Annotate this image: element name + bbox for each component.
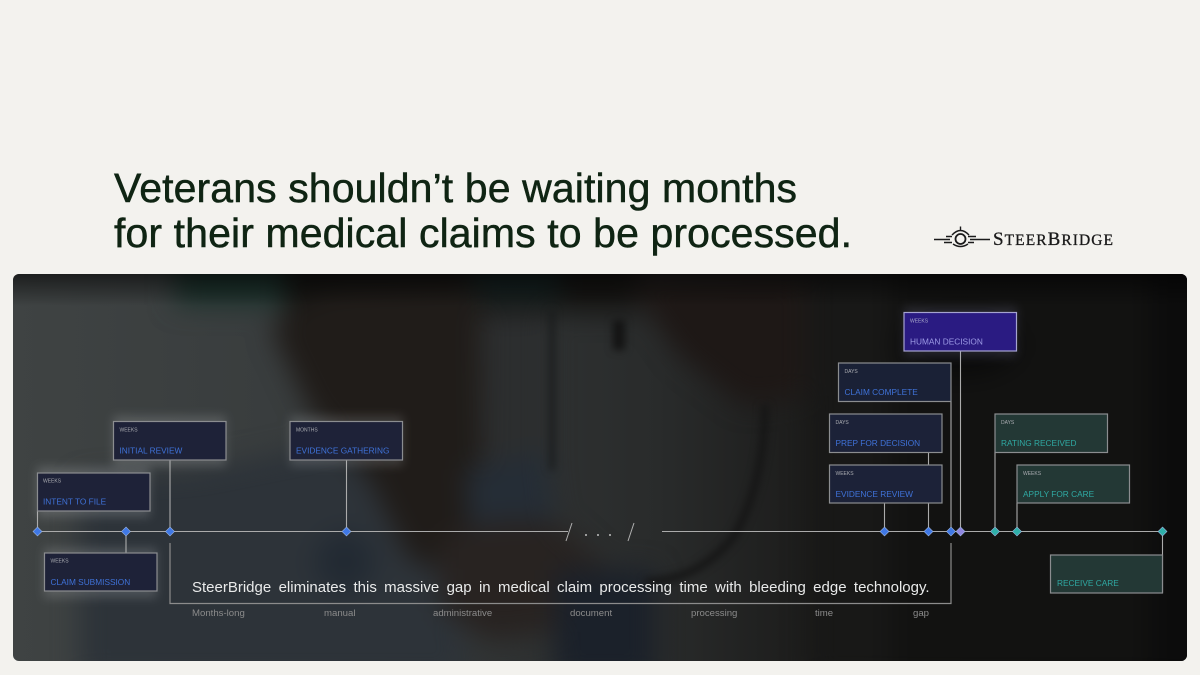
card: intent to file: WEEKS	[43, 478, 62, 484]
timeline axis left	[38, 530, 568, 532]
title: for their medical claims to be processed.	[114, 210, 852, 256]
card: initial review: INITIAL REVIEW	[120, 446, 183, 456]
card: evidence review: WEEKS	[836, 471, 854, 477]
gap labels: administrative	[433, 608, 492, 619]
card: human decision: WEEKS	[910, 318, 929, 324]
gap labels: gap	[913, 608, 929, 619]
card: apply for care: WEEKS	[1023, 471, 1042, 477]
card: apply for care	[1017, 465, 1130, 503]
timeline break marks	[566, 523, 634, 541]
card: prep for decision: DAYS	[836, 420, 849, 426]
gap bracket	[170, 543, 951, 604]
card: claim submission	[44, 548, 157, 598]
gap labels: manual	[324, 608, 355, 619]
card: apply for care: APPLY FOR CARE	[1023, 489, 1095, 499]
card: intent to file	[37, 467, 150, 517]
card: initial review: WEEKS	[120, 428, 138, 434]
card: evidence gathering: MONTHS	[296, 428, 318, 434]
headline statement: SteerBridge eliminates this massive gap in medical claim processing time with bleeding edge technology.	[192, 579, 930, 596]
stethoscope and stripes	[646, 460, 759, 586]
card: claim submission: CLAIM SUBMISSION	[50, 577, 130, 587]
title	[114, 165, 852, 256]
card: rating received	[995, 414, 1108, 452]
logo: SteerBridge	[934, 226, 1113, 250]
gap labels	[192, 608, 929, 619]
timeline diamonds	[33, 527, 1167, 536]
card: evidence gathering	[290, 416, 403, 466]
card: initial review	[113, 416, 226, 466]
gap labels: Months-long	[192, 608, 245, 619]
card: human decision: HUMAN DECISION	[910, 336, 983, 346]
card: evidence review	[830, 465, 942, 503]
card: receive care: RECEIVE CARE	[1057, 578, 1119, 588]
card: claim complete: DAYS	[844, 369, 858, 375]
card: rating received: RATING RECEIVED	[1001, 438, 1076, 448]
icon: logo emblem	[934, 226, 990, 246]
connector stems	[38, 351, 1162, 593]
gap labels: time	[815, 608, 833, 619]
card: claim complete	[838, 363, 951, 402]
teal wall patches, head, sleeve, hand, hair, dark right side	[170, 274, 288, 314]
panel: blurred photo background	[13, 255, 1200, 675]
gap labels: document	[570, 608, 612, 619]
card: human decision	[904, 307, 1017, 357]
card: evidence gathering: EVIDENCE GATHERING	[296, 446, 389, 456]
card: evidence review: EVIDENCE REVIEW	[836, 489, 913, 499]
title: Veterans shouldn’t be waiting months	[114, 165, 797, 211]
timeline	[38, 351, 1162, 604]
card: prep for decision	[830, 414, 942, 452]
timeline axis right	[662, 530, 1162, 532]
logo: SteerBridge: STEERBRIDGE	[993, 229, 1113, 250]
card: claim complete: CLAIM COMPLETE	[844, 387, 918, 397]
card: prep for decision: PREP FOR DECISION	[836, 438, 920, 448]
card: intent to file: INTENT TO FILE	[43, 496, 107, 506]
card: claim submission: WEEKS	[50, 558, 69, 564]
card: receive care	[1050, 555, 1162, 593]
gap labels: processing	[691, 608, 737, 619]
card: rating received: DAYS	[1001, 420, 1015, 426]
